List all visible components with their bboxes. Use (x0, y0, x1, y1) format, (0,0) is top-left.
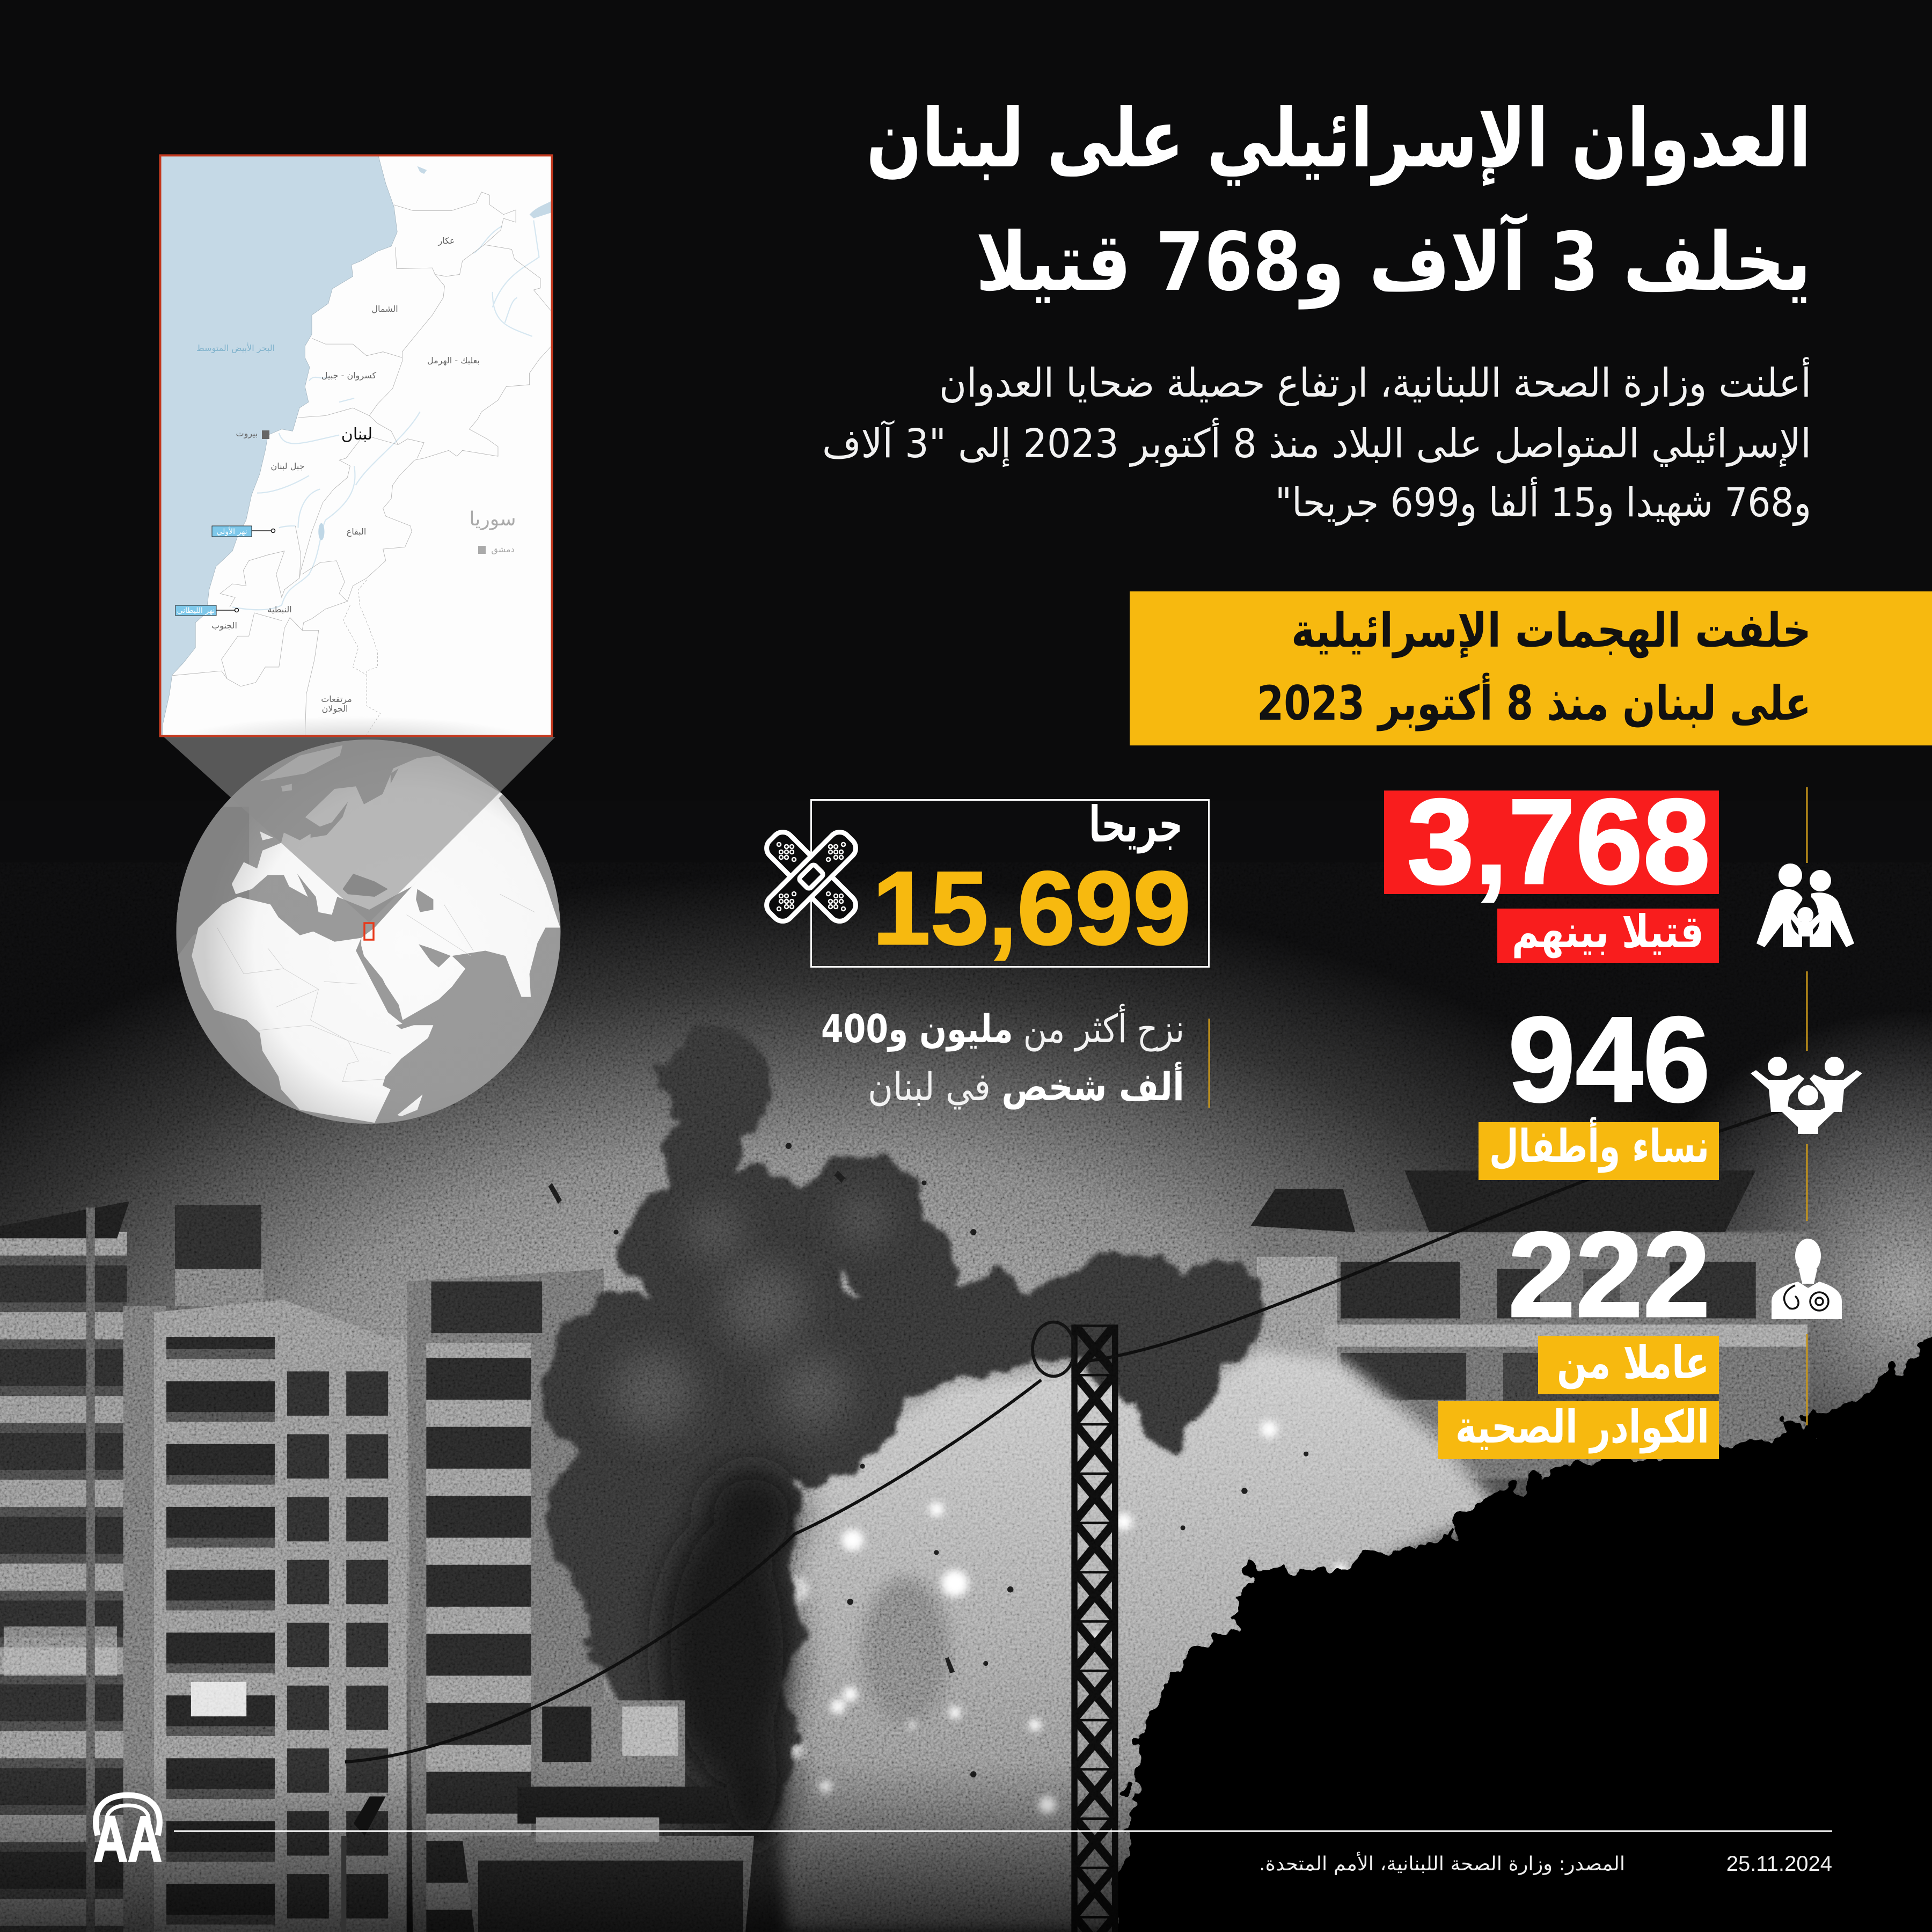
stat: wounded box: جريحا (1089, 796, 1183, 854)
stat: killed: قتيلا بينهم (1512, 905, 1704, 958)
globe with locator (164, 737, 560, 1124)
locator rectangle (364, 923, 374, 940)
buildings: left block (0, 1202, 604, 1932)
footer: source and date (1259, 1851, 1832, 1876)
borders (217, 894, 535, 1082)
map labels: لبنان (341, 425, 372, 444)
borders (172, 192, 551, 737)
stat: women and children: نساء وأطفال (1489, 1117, 1709, 1173)
stat: health workers: 222 (1508, 1206, 1710, 1342)
map labels: دمشق (491, 544, 515, 555)
tower and cables (345, 1109, 1787, 1932)
map labels: جبل لبنان (270, 461, 305, 471)
title (866, 92, 1811, 310)
intro paragraph: الإسرائيلي المتواصل على البلاد منذ 8 أكتوبر 2023 إلى "3 آلاف (822, 418, 1811, 467)
divider lines (1806, 787, 1807, 1425)
stat: health workers: الكوادر الصحية (1455, 1401, 1709, 1454)
heading banner: خلفت الهجمات الإسرائيلية (1291, 603, 1811, 658)
building: right house (1250, 1170, 1809, 1479)
icon: children (1751, 1057, 1862, 1134)
footer: source and date: المصدر: وزارة الصحة اللبنانية، الأمم المتحدة. (1259, 1851, 1625, 1875)
displacement note: ألف شخص في لبنان (868, 1062, 1184, 1110)
stat: wounded box (811, 796, 1209, 967)
map labels: الجولان (322, 704, 348, 714)
map labels: النبطية (267, 604, 292, 614)
displacement note: نزح أكثر من مليون و400 (821, 1004, 1184, 1052)
icon: family (1757, 863, 1854, 947)
heading banner: على لبنان منذ 8 أكتوبر 2023 (1257, 672, 1811, 731)
map labels: الشمال (371, 304, 398, 314)
map labels: البقاع (347, 526, 366, 537)
debris (548, 1143, 1308, 1777)
map labels: الجنوب (211, 620, 237, 631)
map labels: بعلبك - الهرمل (427, 355, 480, 366)
sea (156, 152, 397, 741)
land masses (192, 745, 560, 1123)
logo: AA: AA (93, 1803, 162, 1875)
stat: women and children: 946 (1508, 991, 1710, 1127)
logo: AA (93, 1795, 162, 1875)
intro paragraph: أعلنت وزارة الصحة اللبنانية، ارتفاع حصيلة ضحايا العدوان (939, 357, 1811, 406)
stat: health workers: عاملا من (1557, 1336, 1709, 1389)
rivers (232, 221, 539, 610)
intro paragraph: و768 شهيدا و15 ألفا و699 جريحا" (1275, 477, 1811, 526)
intro paragraph (822, 357, 1811, 526)
building: bottom centre sign (462, 1817, 754, 1932)
stat: women and children (1479, 991, 1719, 1180)
map of Lebanon (156, 152, 553, 741)
stat: health workers (1438, 1206, 1719, 1459)
map labels: كسروان - جبيل (321, 370, 377, 381)
map labels: نهر الأولي (216, 526, 247, 536)
map labels: بيروت (236, 428, 258, 439)
displacement note (821, 1004, 1209, 1110)
icon: crossed bandages (762, 828, 860, 926)
map labels: البحر الأبيض المتوسط (196, 342, 275, 354)
map labels (175, 236, 516, 714)
icon: doctor (1772, 1239, 1842, 1319)
footer line (174, 1830, 1832, 1832)
seas (311, 769, 451, 1029)
stat: killed: 3,768 (1407, 773, 1710, 909)
building: lower storeys by smoke (517, 1700, 727, 1824)
ocean shading (174, 807, 249, 961)
heading banner (1130, 591, 1932, 745)
map labels: سوريا (469, 508, 516, 530)
smoke plume (542, 1023, 1265, 1848)
footer: source and date: 25.11.2024 (1726, 1852, 1832, 1876)
stat: wounded box: 15,699 (873, 850, 1191, 967)
map labels: عكار (438, 236, 455, 246)
zoom cone (164, 737, 555, 923)
title: يخلف 3 آلاف و768 قتيلا (976, 213, 1811, 310)
map labels: مرتفعات (321, 694, 352, 705)
map labels: نهر الليطاني (177, 606, 215, 615)
stat: killed (1384, 773, 1719, 963)
explosion cloud (770, 1349, 1497, 1932)
trees silhouette (1115, 1337, 1932, 1932)
